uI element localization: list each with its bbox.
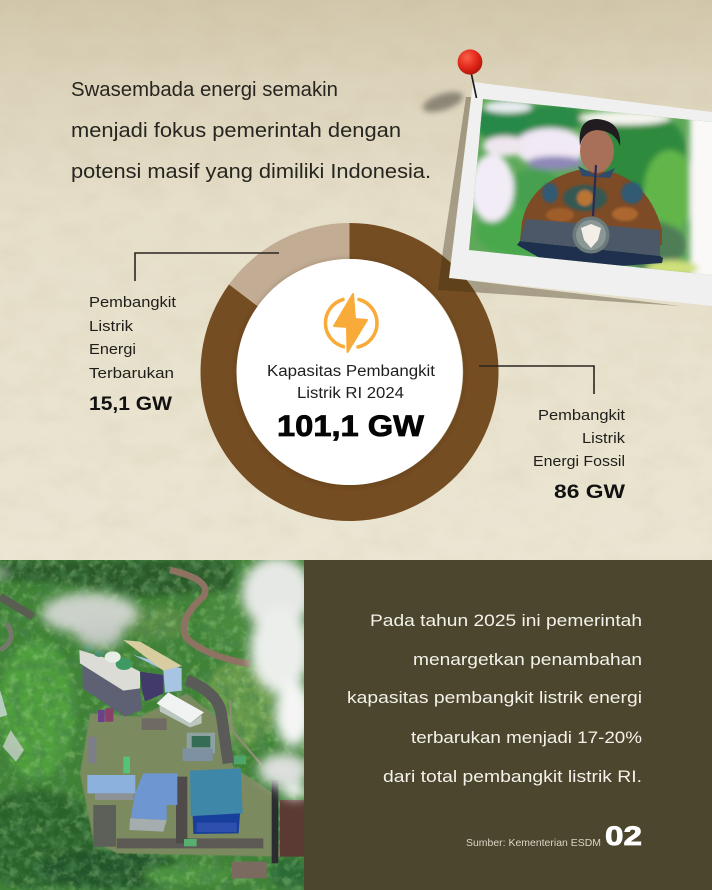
label: renewable	[89, 295, 176, 415]
intro heading text: menjadi fokus pemerintah dengan	[71, 119, 401, 142]
site ground	[80, 693, 280, 857]
main building	[82, 663, 142, 717]
small units	[98, 710, 105, 722]
steam	[0, 557, 312, 798]
page number: 02	[605, 821, 642, 851]
label: fossil: Energi Fossil	[533, 454, 625, 470]
panel body text: menargetkan penambahan	[413, 650, 642, 669]
photo card shadow	[438, 97, 680, 306]
white hall	[157, 692, 204, 723]
icon: lightning bolt	[325, 294, 377, 352]
microphone	[593, 165, 596, 216]
donut centre label: Kapasitas Pembangkit	[267, 363, 436, 380]
leader line: renewable	[135, 253, 279, 281]
segment: fossil 86 GW	[201, 223, 499, 521]
label: fossil: Pembangkit	[538, 408, 625, 424]
label: renewable: Energi	[89, 342, 136, 358]
segment: renewable 15.1 GW	[229, 223, 350, 306]
icon: red push pin	[458, 49, 482, 98]
donut centre label: Listrik RI 2024	[297, 385, 404, 402]
pylons	[3, 730, 24, 762]
intro heading text: potensi masif yang dimiliki Indonesia.	[71, 160, 431, 183]
blue halls	[87, 775, 135, 793]
panel body text	[347, 611, 642, 786]
panel body text: Pada tahun 2025 ini pemerintah	[370, 611, 642, 630]
donut centre label	[267, 363, 436, 443]
photo card: speaker at podium	[449, 82, 712, 306]
label: renewable: Pembangkit	[89, 295, 176, 311]
donut centre label: 101,1 GW	[277, 410, 425, 443]
panel body text: kapasitas pembangkit listrik energi	[347, 688, 642, 707]
panel body text: dari total pembangkit listrik RI.	[383, 767, 642, 786]
leader line: fossil	[479, 366, 594, 394]
pin shadow	[421, 88, 465, 116]
intro heading text	[71, 78, 431, 183]
label: fossil: 86 GW	[554, 482, 625, 503]
aerial photo: geothermal plant	[0, 557, 312, 890]
paper background	[0, 0, 712, 560]
intro heading text: Swasembada energi semakin	[71, 78, 338, 101]
panel: target 2025	[304, 560, 712, 890]
label: renewable: Listrik	[89, 319, 134, 335]
label: fossil	[533, 408, 626, 503]
centre disc	[236, 259, 462, 485]
speaker	[520, 170, 662, 245]
label: renewable: 15,1 GW	[89, 394, 172, 415]
dirt road	[170, 570, 250, 664]
lower building	[232, 862, 267, 878]
panel body text: terbarukan menjadi 17-20%	[411, 728, 642, 747]
source note: Sumber: Kementerian ESDM	[466, 837, 601, 849]
label: fossil: Listrik	[582, 431, 626, 447]
label: renewable: Terbarukan	[89, 366, 174, 382]
podium	[517, 241, 663, 266]
donut chart: capacity share	[201, 223, 499, 521]
